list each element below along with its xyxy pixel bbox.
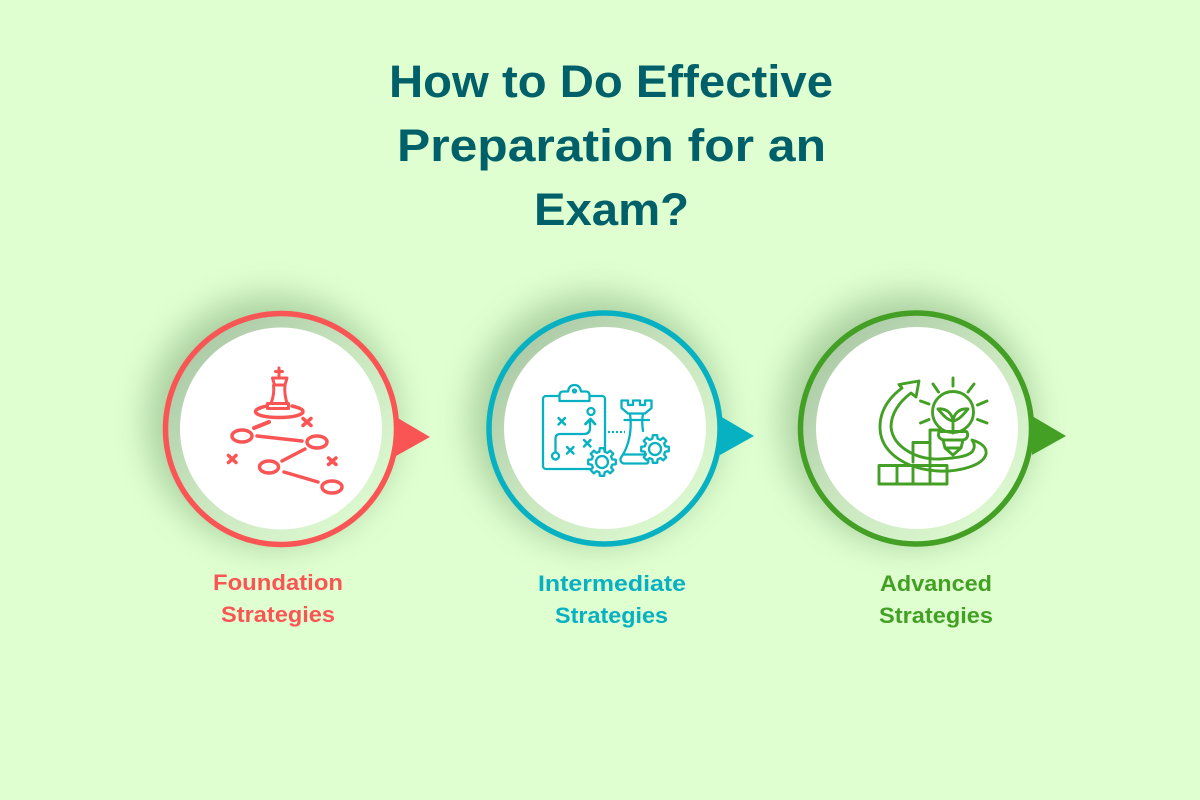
panel: foundation strategies	[148, 297, 430, 627]
icon: chess king strategy map	[228, 368, 342, 493]
title	[389, 56, 833, 235]
label: advanced strategies: Advanced	[880, 571, 992, 596]
label: foundation strategies: Strategies	[221, 602, 335, 627]
label: advanced strategies: Strategies	[879, 603, 993, 628]
circle badge: foundation	[148, 297, 430, 545]
icon: clipboard plan with chess rook and gears	[543, 385, 669, 476]
icon: growth bars, arrow and light bulb	[879, 378, 987, 484]
panel: advanced strategies	[784, 296, 1066, 628]
label: intermediate strategies: Intermediate	[538, 571, 686, 596]
label: foundation strategies: Foundation	[213, 570, 343, 595]
title: Exam?	[534, 184, 689, 235]
label: intermediate strategies: Strategies	[555, 603, 668, 628]
title: How to Do Effective	[389, 56, 833, 107]
panel: intermediate strategies	[472, 296, 754, 628]
label: intermediate strategies	[538, 571, 686, 628]
circle badge: advanced	[784, 296, 1066, 544]
label: foundation strategies	[213, 570, 343, 627]
title: Preparation for an	[397, 120, 826, 171]
label: advanced strategies	[879, 571, 993, 628]
circle badge: intermediate	[472, 296, 754, 544]
